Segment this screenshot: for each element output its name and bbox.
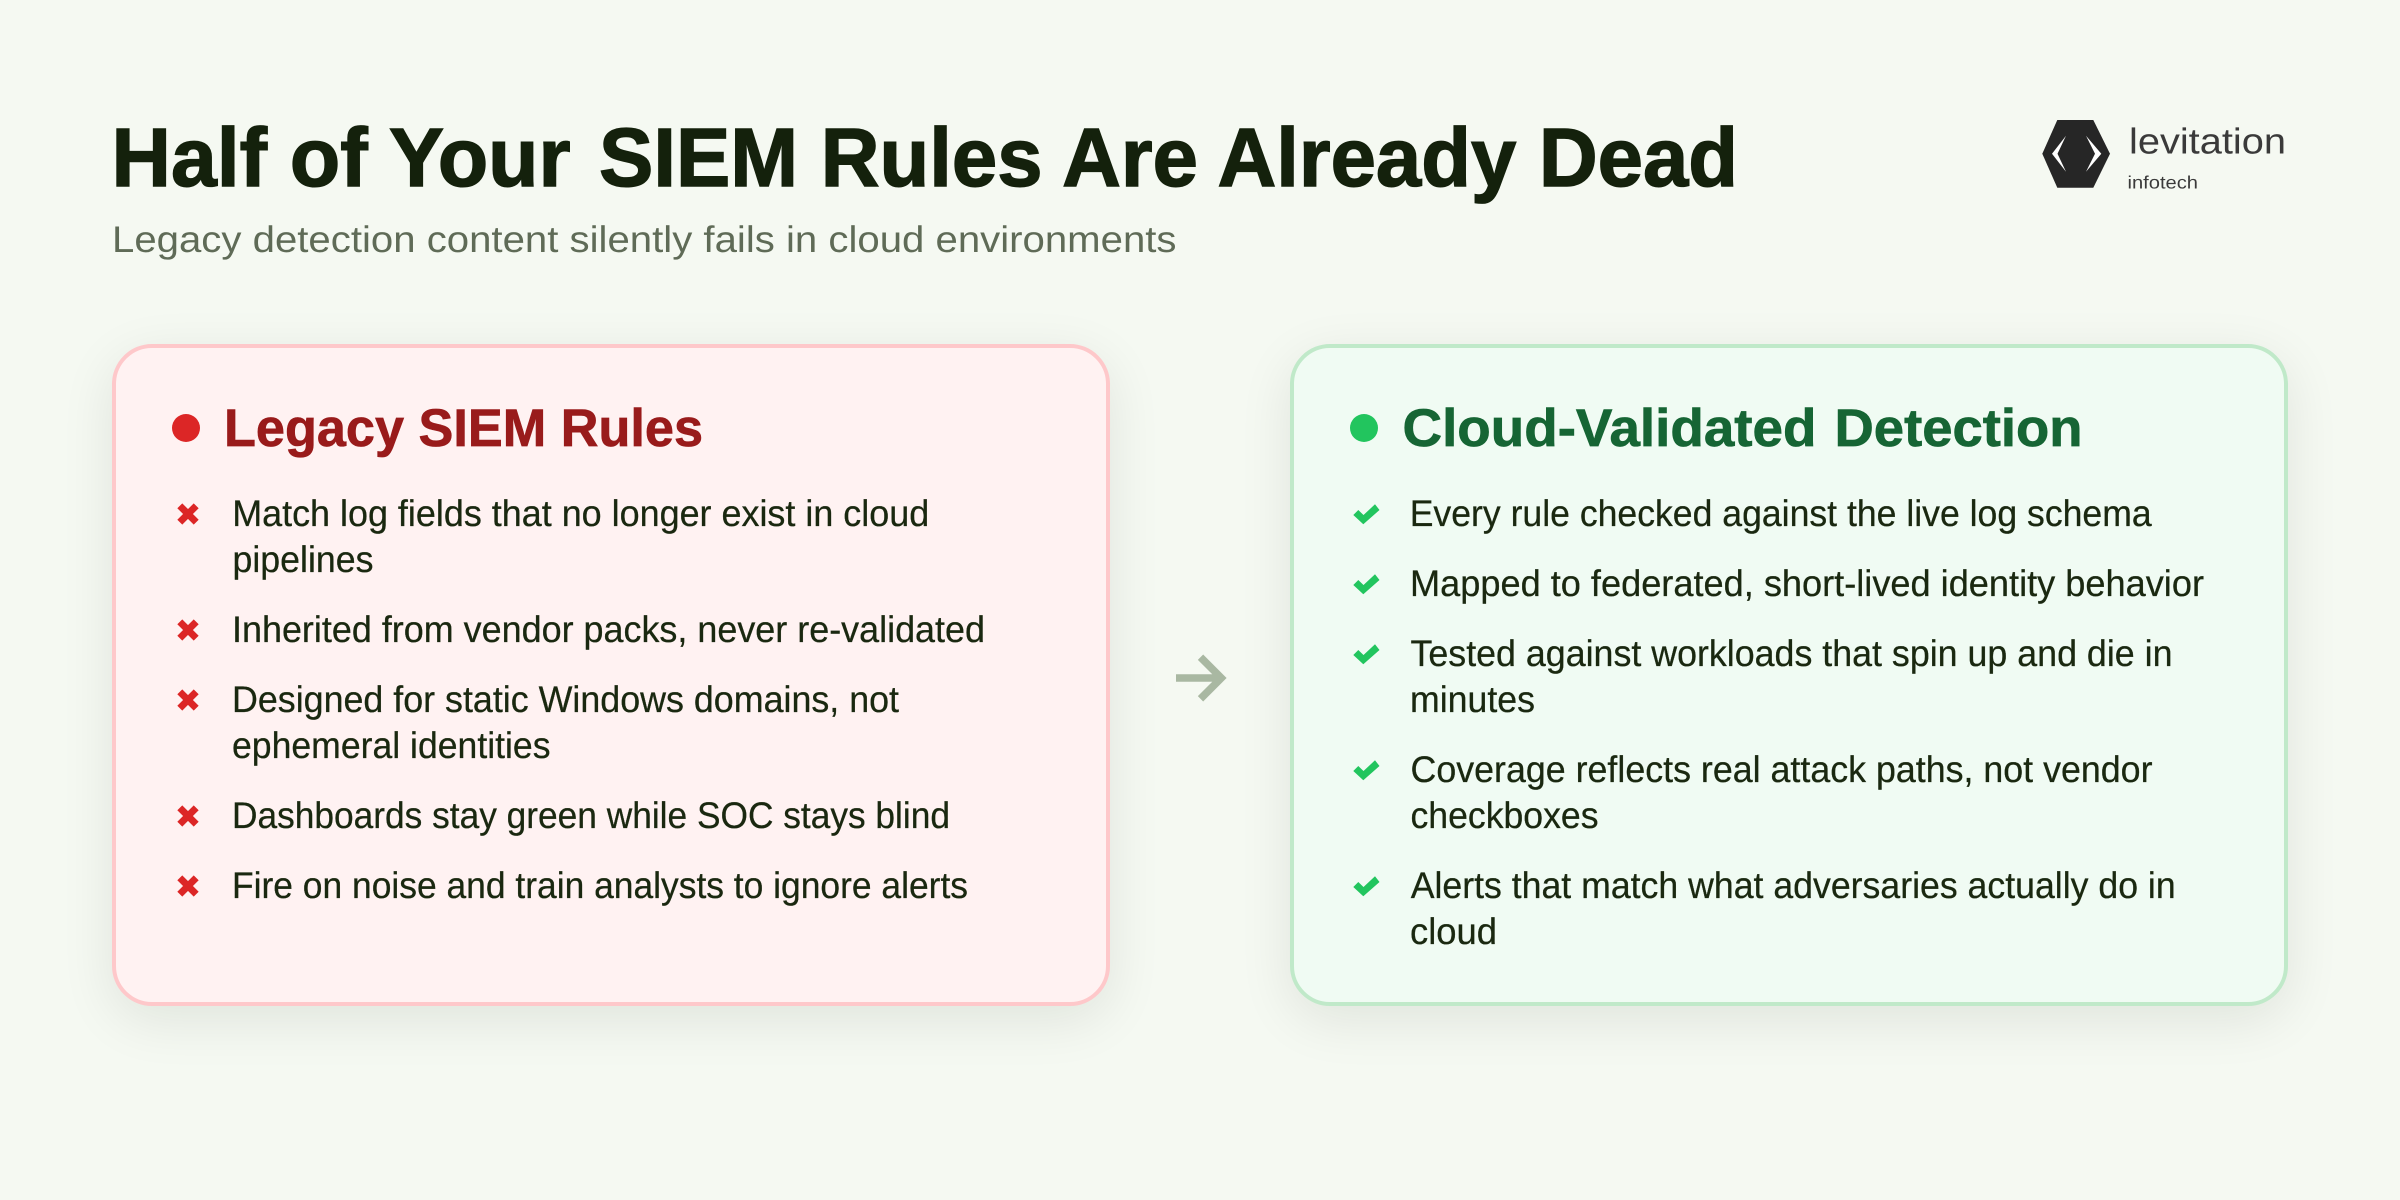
item: designed for static windows — [180, 679, 900, 766]
item: tested against workloads: Tested against workloads that spin up and die in — [1410, 633, 2172, 674]
panel heading: cloud-validated: Cloud-Validated — [1402, 399, 1816, 458]
item: match log fields — [180, 493, 929, 580]
panel heading: legacy: Legacy SIEM Rules — [224, 399, 703, 458]
panel heading: cloud-validated: Detection — [1834, 399, 2082, 458]
item: designed for static windows: ephemeral identities — [232, 725, 550, 766]
logo wordmark: infotech — [2128, 173, 2198, 193]
item: alerts match adversaries: Alerts that match what adversaries actually do in — [1411, 865, 2176, 906]
item: tested against workloads — [1353, 633, 2172, 720]
item: alerts match adversaries — [1353, 865, 2176, 952]
item: tested against workloads: minutes — [1410, 679, 1535, 720]
logo: levitation infotech — [2042, 120, 2286, 193]
item: inherited from vendor packs: Inherited from vendor packs, never re-validated — [232, 609, 985, 650]
arrow: legacy to cloud-validated — [1176, 654, 1226, 702]
item: match log fields: Match log fields that no longer exist in cloud — [232, 493, 929, 534]
title — [112, 111, 1738, 204]
status dot: red — [172, 414, 200, 442]
item: fire on noise: Fire on noise and train analysts to ignore alerts — [232, 865, 968, 906]
status dot: green — [1350, 414, 1378, 442]
item: alerts match adversaries: cloud — [1410, 911, 1497, 952]
logo wordmark — [2128, 120, 2286, 193]
item: coverage reflects attack paths: checkboxes — [1410, 795, 1598, 836]
item: every rule checked: Every rule checked against the live log schema — [1410, 493, 2152, 534]
item: match log fields: pipelines — [232, 539, 374, 580]
item: designed for static windows: Designed for static Windows domains, not — [232, 679, 900, 720]
subtitle: Legacy detection content silently fails in cloud environments — [112, 219, 1176, 260]
item: mapped to federated identity: Mapped to federated, short-lived identity behavior — [1410, 563, 2204, 604]
item: dashboards stay green: Dashboards stay green while SOC stays blind — [232, 795, 950, 836]
item: coverage reflects attack paths — [1353, 749, 2152, 836]
item: coverage reflects attack paths: Coverage reflects real attack paths, not vendor — [1410, 749, 2152, 790]
logo wordmark: levitation — [2129, 120, 2286, 161]
panel: legacy SIEM rules — [112, 344, 1110, 1006]
header: title and subtitle — [112, 111, 1738, 260]
panel heading: cloud-validated — [1402, 399, 2082, 458]
panel: cloud-validated detection — [1290, 344, 2288, 1006]
title: Half of Your — [112, 111, 570, 204]
title: SIEM Rules Are Already Dead — [599, 111, 1738, 204]
icon: hexagon with chevrons — [2042, 120, 2110, 188]
